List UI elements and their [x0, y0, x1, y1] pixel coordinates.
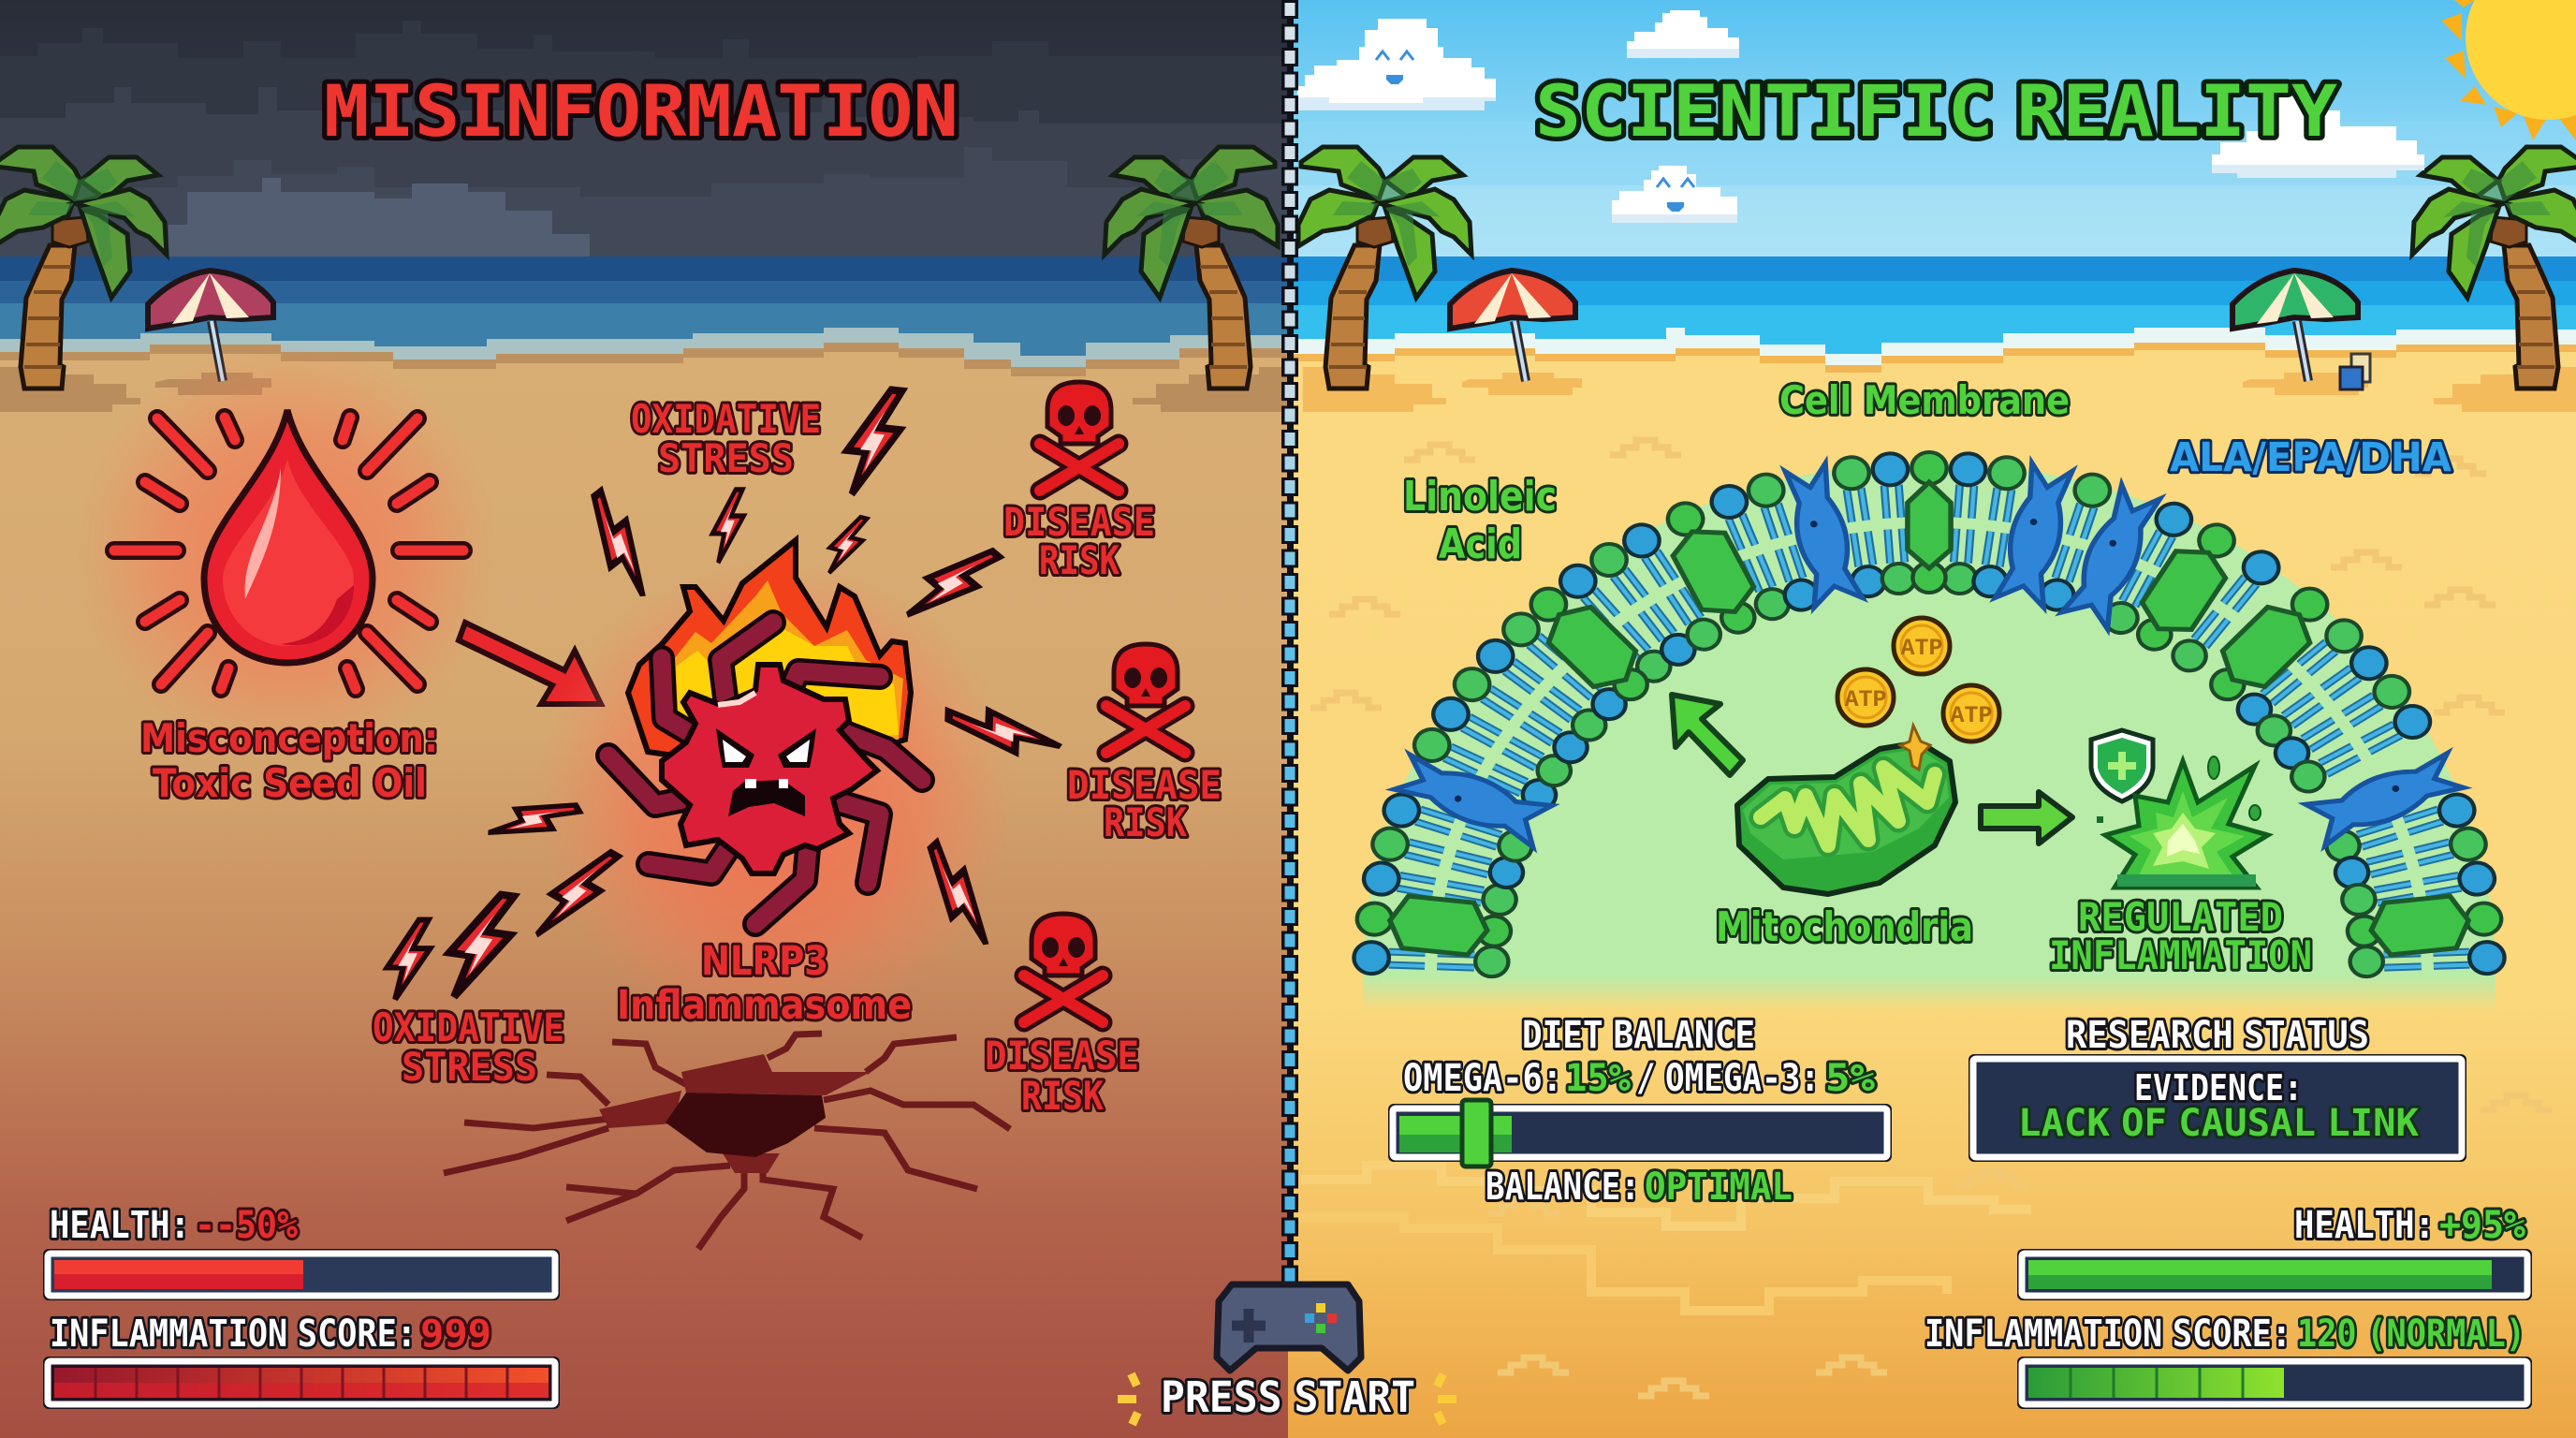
label: regulated inflammation: INFLAMMATION	[2049, 932, 2312, 978]
panel: misinformation background	[0, 0, 1288, 1438]
label: health left	[50, 1204, 298, 1247]
icon: membrane dome background	[1363, 462, 2496, 1011]
icon: storm palm right	[1105, 147, 1278, 389]
label: disease risk one	[1003, 499, 1155, 583]
slider bar	[1388, 1100, 1892, 1167]
icon: cloud with smile center	[1612, 166, 1737, 223]
title: scientific reality: SCIENTIFIC REALITY	[1535, 69, 2337, 153]
label: health left: --50%	[195, 1204, 298, 1247]
label: disease risk three: RISK	[1021, 1073, 1105, 1119]
label: linoleic acid	[1403, 473, 1557, 568]
label: disease risk three	[985, 1033, 1139, 1119]
panel: right status bars	[1925, 1204, 2532, 1409]
label: linoleic acid: Acid	[1439, 521, 1522, 568]
icon: sun	[2441, 0, 2576, 140]
icon: blood drop with rays	[77, 342, 498, 763]
score bar right	[2017, 1357, 2532, 1409]
arrow: drop to inflammasome	[459, 623, 601, 704]
label: mitochondria: Mitochondria	[1716, 903, 1973, 951]
label: health right: HEALTH:	[2294, 1204, 2435, 1247]
icon: small cloud	[1627, 10, 1739, 58]
icon: ATP coins: ATP	[1900, 635, 1943, 662]
label: NLRP3 inflammasome	[617, 938, 912, 1029]
label: disease risk two: DISEASE	[1067, 762, 1222, 808]
icon: cloud behind title	[2212, 96, 2424, 178]
icon: beach chair	[2340, 354, 2370, 389]
icon: storm palm left	[0, 147, 167, 389]
divider: pixel chain	[1287, 0, 1294, 1287]
icon: mitochondrion	[1737, 726, 1955, 894]
icon: shield	[2091, 730, 2153, 801]
label: omega ratio: 5%	[1825, 1057, 1875, 1100]
label: diet balance heading: DIET BALANCE	[1522, 1014, 1755, 1057]
icon: sunny palm left	[1298, 147, 1471, 389]
icon: cloud with smile left	[1297, 19, 1496, 110]
arrow: up-left to membrane	[1672, 695, 1743, 775]
title: misinformation: MISINFORMATION	[324, 69, 959, 153]
health bar left	[43, 1249, 560, 1300]
label: research status heading: RESEARCH STATUS	[2066, 1014, 2369, 1057]
label: lack of causal link: LACK OF CAUSAL LINK	[2018, 1102, 2419, 1145]
icon: inflammasome monster on fire	[536, 540, 1014, 1034]
label: NLRP3 inflammasome: Inflammasome	[617, 982, 912, 1029]
label: misconception: Toxic Seed Oil	[153, 760, 427, 806]
icon: sunny palm right	[2412, 147, 2576, 389]
icon: ground crack	[444, 1034, 1010, 1249]
label: disease risk three: DISEASE	[985, 1033, 1139, 1078]
panel: left status bars	[43, 1204, 560, 1409]
label: inflammation score right: 120 (NORMAL)	[2297, 1313, 2525, 1356]
score bar left	[43, 1357, 560, 1409]
label: balance optimal	[1486, 1166, 1793, 1209]
label: regulated inflammation: REGULATED	[2078, 894, 2283, 940]
label: linoleic acid: Linoleic	[1403, 473, 1557, 521]
icon: regulated inflammation burst	[2097, 756, 2268, 888]
evidence box	[1969, 1054, 2466, 1162]
icon: umbrella red	[1450, 271, 1575, 381]
label: oxidative stress top: STRESS	[658, 435, 794, 481]
label: omega ratio: OMEGA-6:	[1403, 1057, 1562, 1100]
icon: ATP coins: ATP	[1844, 686, 1887, 713]
label: cell membrane: Cell Membrane	[1779, 377, 2070, 423]
label: omega ratio: / OMEGA-3:	[1636, 1057, 1820, 1100]
label: health left: HEALTH:	[50, 1204, 190, 1247]
label: omega ratio	[1403, 1057, 1875, 1100]
label: misconception: Misconception:	[140, 715, 438, 761]
icon: skull one	[1040, 382, 1119, 491]
icon: sparkles	[1118, 1372, 1456, 1426]
label: disease risk two: RISK	[1104, 800, 1188, 845]
chart: cell membrane bilayer	[1354, 452, 2505, 978]
label: oxidative stress top	[631, 396, 821, 481]
panel: scientific reality background	[1288, 0, 2576, 1438]
label: inflammation score right	[1925, 1313, 2525, 1356]
label: health right: +95%	[2439, 1204, 2525, 1247]
health bar right	[2017, 1249, 2532, 1300]
icon: umbrella storm	[148, 271, 273, 381]
label: inflammation score right: INFLAMMATION SCORE:	[1925, 1313, 2291, 1356]
icon: lightning bolts	[388, 386, 1061, 1004]
label: evidence: EVIDENCE:	[2134, 1067, 2303, 1108]
label: NLRP3 inflammasome: NLRP3	[701, 938, 828, 985]
label: regulated inflammation	[2049, 894, 2312, 978]
panel: research status	[1969, 1014, 2466, 1162]
label: omega ratio: 15%	[1565, 1057, 1631, 1100]
label: disease risk two	[1067, 762, 1222, 845]
label: inflammation score left: 999	[420, 1313, 491, 1356]
label: oxidative stress bottom: STRESS	[402, 1044, 537, 1090]
icon: skull two	[1106, 644, 1185, 753]
label: misconception	[140, 715, 438, 806]
label: press start: PRESS START	[1161, 1372, 1415, 1422]
icon: umbrella green	[2232, 271, 2358, 381]
label: balance optimal: OPTIMAL	[1645, 1166, 1793, 1209]
label: inflammation score left: INFLAMMATION SCORE:	[50, 1313, 417, 1356]
label: balance optimal: BALANCE:	[1486, 1166, 1640, 1209]
label: disease risk one: DISEASE	[1003, 499, 1155, 545]
panel: diet balance	[1388, 1014, 1892, 1209]
label: disease risk one: RISK	[1039, 537, 1120, 583]
label: oxidative stress top: OXIDATIVE	[631, 396, 821, 442]
icon: ATP coins: ATP	[1950, 702, 1993, 729]
icon: skull three	[1024, 914, 1103, 1022]
label: oxidative stress bottom	[373, 1005, 564, 1090]
icon: ATP coins	[1837, 618, 1999, 741]
label: health right	[2294, 1204, 2525, 1247]
label: oxidative stress bottom: OXIDATIVE	[373, 1005, 564, 1050]
arrow: mitochondria to regulated inflammation	[1981, 792, 2072, 844]
icon: game controller	[1217, 1284, 1361, 1371]
label: ALA EPA DHA: ALA/EPA/DHA	[2170, 434, 2452, 481]
